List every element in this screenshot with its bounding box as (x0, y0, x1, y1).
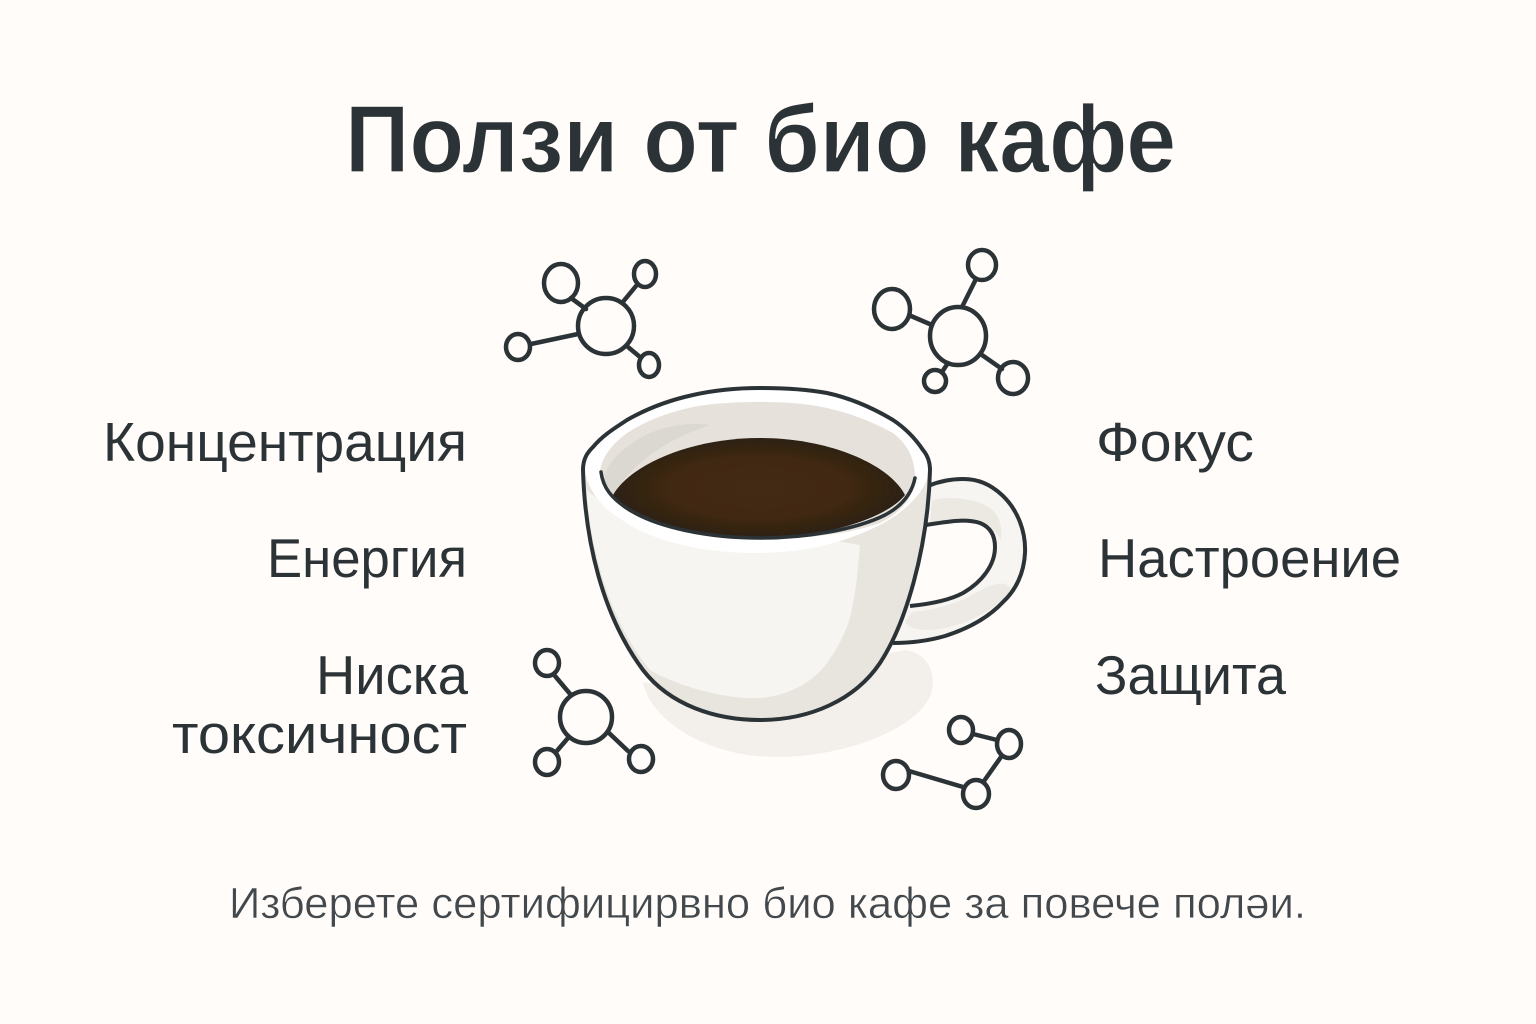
label: Защита: Защита (1095, 644, 1286, 706)
coffee (613, 438, 905, 538)
handle (893, 479, 1025, 643)
label: Ниска токсичност: токсичност (172, 703, 467, 765)
cup body (583, 470, 930, 720)
right labels (1095, 411, 1401, 706)
inner rim line (601, 472, 915, 538)
cup rim (584, 388, 929, 553)
handle shading (930, 498, 1001, 540)
icon: molecule top left (506, 261, 659, 377)
label: Концентрация: Концентрация (103, 411, 467, 473)
cup outline (583, 388, 930, 720)
icon: coffee cup (583, 388, 1025, 757)
label: Енергия: Енергия (267, 527, 467, 589)
label: Фокус: Фокус (1096, 411, 1254, 473)
footer note: Изберете сертифицирвно био кафе за повече полəи. (229, 879, 1306, 928)
cup interior (600, 402, 915, 538)
body highlight (586, 490, 860, 698)
title: Ползи от био кафе (345, 86, 1176, 193)
cup shadow (643, 650, 933, 757)
icon: molecule top right (874, 250, 1028, 394)
label: Ниска токсичност: Ниска (316, 644, 468, 706)
interior shadow (604, 424, 710, 495)
icon: molecule bottom right (883, 717, 1021, 808)
label: Ниска токсичност (172, 644, 468, 765)
label: Настроение: Настроение (1098, 527, 1401, 589)
left labels (103, 411, 468, 765)
icon: molecule bottom left (535, 650, 653, 775)
